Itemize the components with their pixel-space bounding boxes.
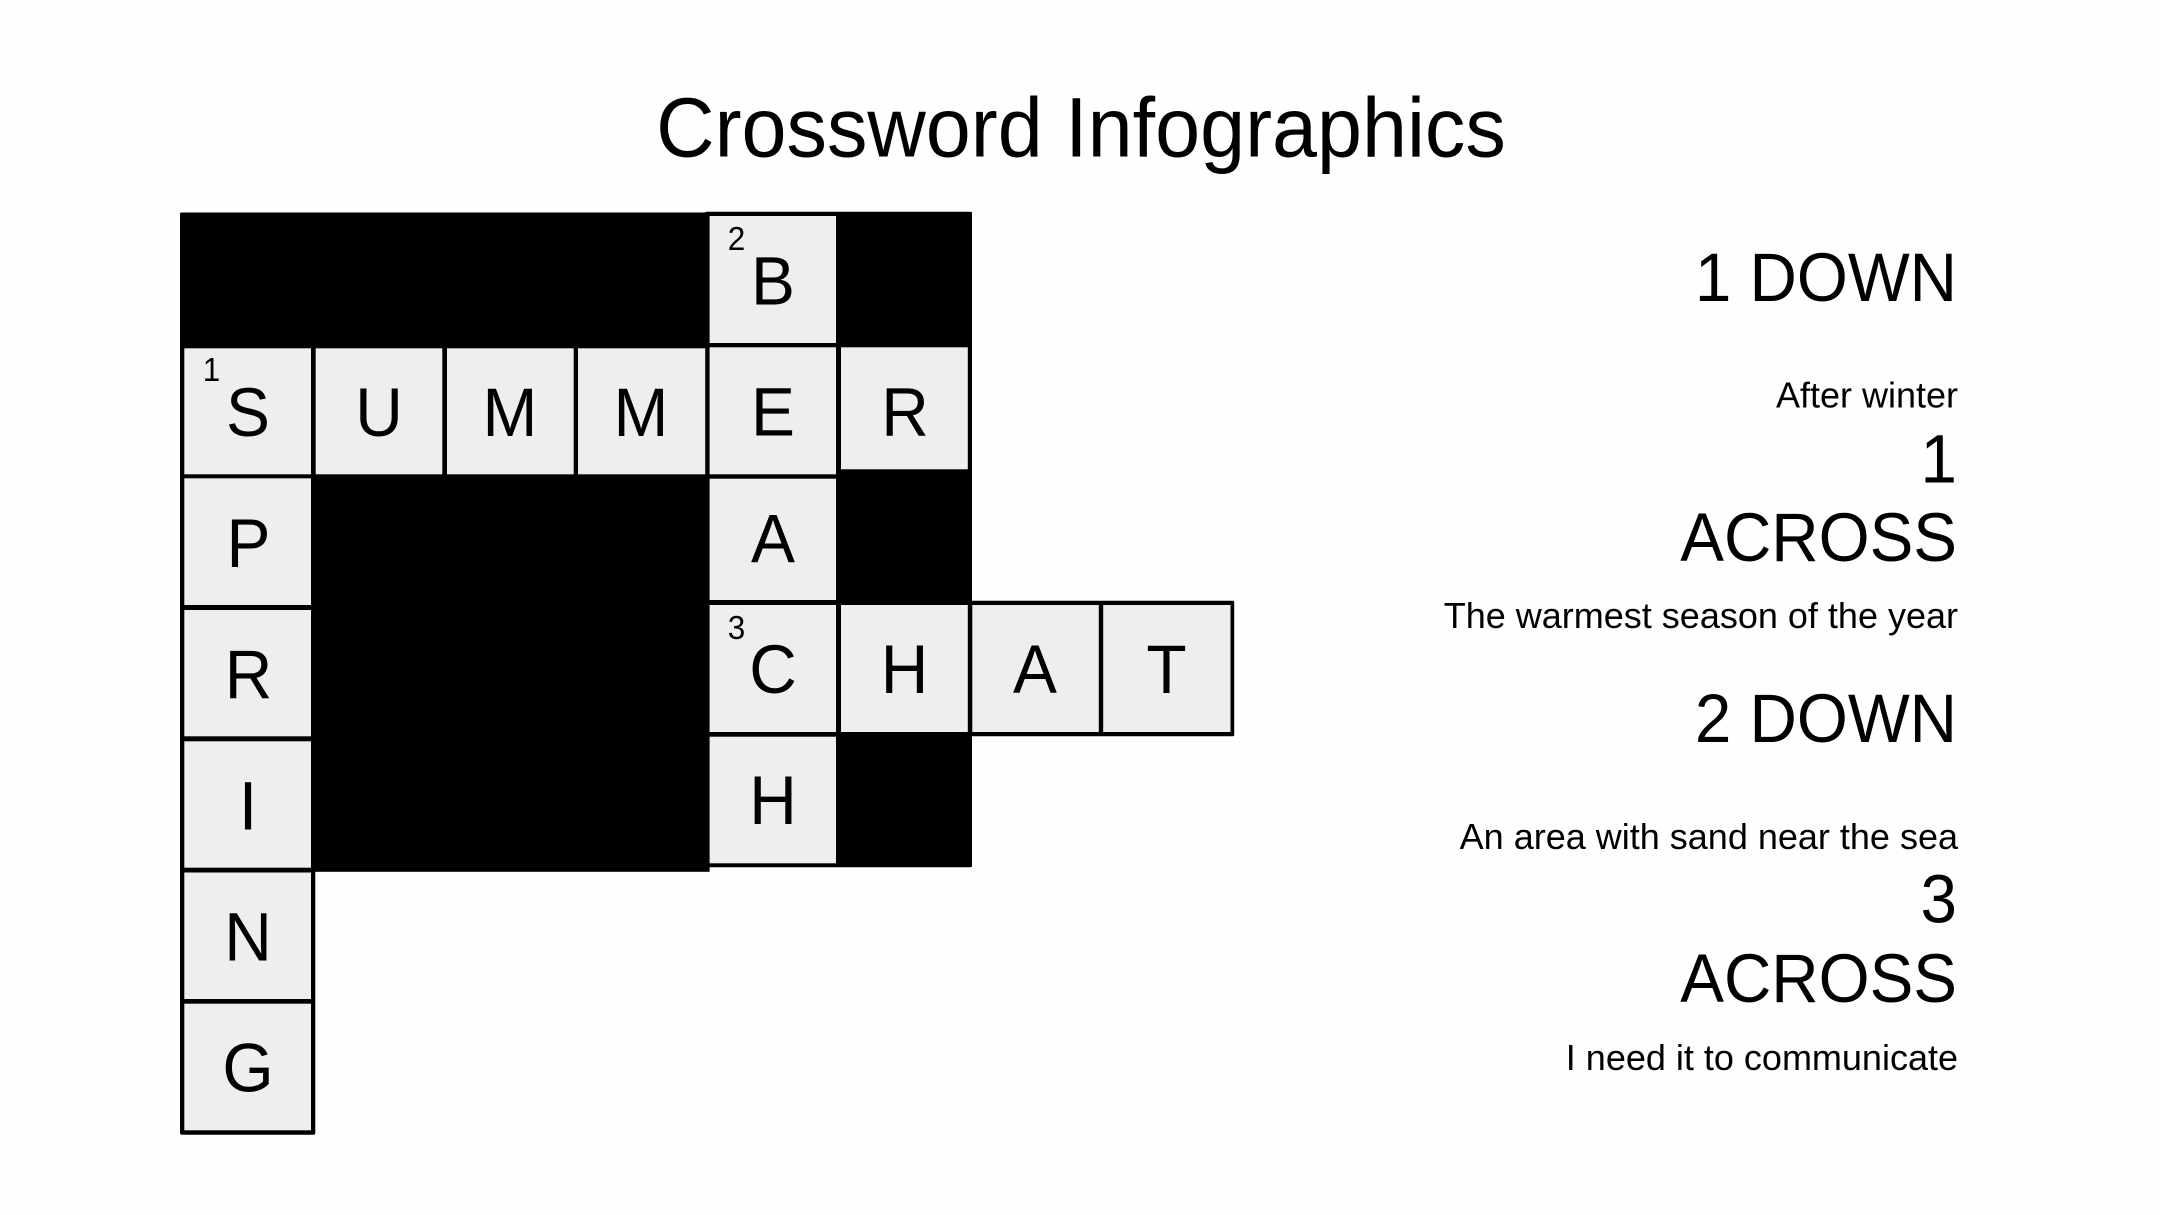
cell N: N: [224, 899, 272, 976]
clue: 3 across: I need it to communicate: [1566, 1037, 1958, 1078]
black blocks and cell borders: [180, 212, 1234, 1135]
cell R: [841, 347, 968, 469]
cell C with number 3: 3: [728, 609, 745, 646]
down: SPRING: [184, 478, 311, 1130]
cell N: [184, 872, 311, 999]
cell B with number 2: 2: [728, 220, 745, 257]
cell I: [184, 741, 311, 868]
cell M: M: [614, 375, 668, 451]
crossword grid: [180, 212, 1234, 1135]
cell H: [841, 605, 968, 732]
panel: clues: [1444, 240, 1959, 1078]
clue: 2 down: [1460, 680, 1959, 857]
cell T: T: [1146, 632, 1187, 708]
cell H: [710, 737, 836, 863]
clue: 3 across: [1566, 861, 1958, 1078]
cell S with number 1: 1: [203, 351, 220, 388]
clue: 1 across: 1: [1921, 421, 1957, 498]
cell E: [710, 347, 836, 474]
cell S with number 1: [184, 348, 311, 474]
cell G: G: [222, 1030, 274, 1107]
cell S with number 1: S: [226, 375, 270, 451]
clue: 2 down: An area with sand near the sea: [1460, 816, 1959, 857]
clue: 1 across: The warmest season of the year: [1444, 595, 1958, 636]
cell U: [316, 348, 442, 474]
clue: 2 down: 2 DOWN: [1695, 680, 1957, 757]
cell A: A: [1013, 632, 1057, 708]
clue: 1 down: [1695, 240, 1958, 416]
title: Crossword Infographics: [656, 81, 1506, 175]
cell A: [710, 479, 836, 600]
cell G: [184, 1004, 311, 1130]
across: CHAT: [710, 605, 1230, 732]
cell R: R: [225, 637, 272, 713]
cell M: [447, 348, 574, 474]
cell H: H: [881, 632, 928, 708]
cell P: [184, 478, 311, 605]
cell U: U: [355, 375, 403, 451]
clue: 1 across: [1444, 421, 1958, 636]
cell M: M: [483, 375, 537, 451]
clue: 1 down: 1 DOWN: [1695, 240, 1957, 317]
clue: 1 down: After winter: [1776, 374, 1958, 416]
cell I: I: [239, 768, 257, 845]
cell A: [972, 605, 1099, 732]
cell P: P: [227, 506, 270, 582]
cell B with number 2: B: [751, 243, 795, 320]
across: SUMMER: [184, 347, 968, 474]
cell E: E: [751, 374, 795, 451]
cell H: H: [749, 763, 797, 839]
cell M: [578, 348, 705, 474]
cell R: R: [881, 374, 929, 451]
down: BEACH: [710, 216, 836, 863]
cell B with number 2: [710, 216, 836, 343]
clue: 1 across: ACROSS: [1680, 500, 1957, 577]
cell R: [184, 610, 311, 736]
cell A: A: [751, 501, 795, 578]
cell C with number 3: C: [749, 632, 797, 708]
clue: 3 across: 3: [1921, 861, 1957, 938]
cell T: [1103, 605, 1230, 732]
clue: 3 across: ACROSS: [1680, 941, 1957, 1018]
cell C with number 3: [710, 605, 836, 732]
